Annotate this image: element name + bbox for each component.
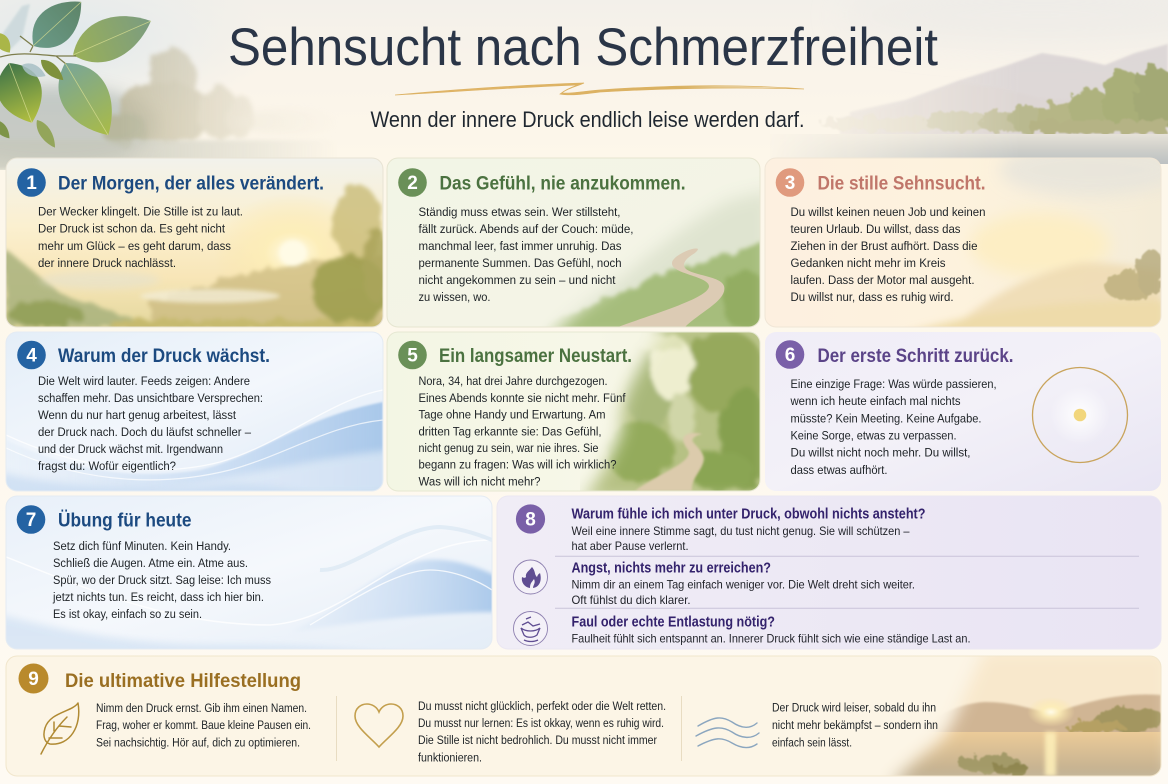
question 1: Warum fühle ich mich unter Druck, obwohl nichts ansteht? <box>572 507 926 523</box>
winding path scene <box>548 191 760 326</box>
body text 4: Die Welt wird lauter. Feeds zeigen: Andere <box>38 374 250 388</box>
badge 1 <box>17 168 46 197</box>
icon: leaf <box>41 703 79 754</box>
body text 7: Setz dich fünf Minuten. Kein Handy. <box>53 539 231 553</box>
badge 7 <box>17 505 45 534</box>
panel 4: Warum der Druck wächst <box>0 332 390 500</box>
badge 5: 5 <box>407 346 418 366</box>
body text 5: nicht genug zu sein, war nie ihres. Sie <box>418 441 599 455</box>
body text 7: jetzt nichts tun. Es reicht, dass ich hier bin. <box>52 590 264 604</box>
body text 1: der innere Druck nachlässt. <box>38 256 176 270</box>
blue waves <box>6 390 382 490</box>
sunrise scene <box>6 185 390 330</box>
body text 4: Wenn du nur hart genug arbeitest, lässt <box>38 408 237 422</box>
question 2: Nimm dir an einem Tag einfach weniger vor. Die Welt dreht sich weiter. <box>572 578 915 592</box>
body text 4: der Druck nach. Doch du läufst schneller – <box>38 425 251 439</box>
heading 6: Der erste Schritt zurück. <box>818 345 1014 367</box>
body text 3 <box>790 205 986 304</box>
heading 1: Der Morgen, der alles verändert. <box>58 172 324 194</box>
badge 2: 2 <box>407 173 418 194</box>
body text 3: Du willst nur, dass es ruhig wird. <box>790 290 954 304</box>
body text 3: Gedanken nicht mehr im Kreis <box>790 256 946 270</box>
question 1: Weil eine innere Stimme sagt, du tust nicht genug. Sie will schützen – <box>572 524 910 538</box>
heading 3: Die stille Sehnsucht. <box>818 172 986 194</box>
icon: flame <box>514 560 548 594</box>
icon: calm water <box>514 612 548 646</box>
body text 9b <box>418 699 666 764</box>
title: Sehnsucht nach Schmerzfreiheit <box>228 18 938 77</box>
question 3 <box>572 615 970 645</box>
badge 6: 6 <box>785 345 795 366</box>
body text 9a: Nimm den Druck ernst. Gib ihm einen Namen. <box>96 701 307 715</box>
body text 7: Spür, wo der Druck sitzt. Sag leise: Ich muss <box>53 573 271 587</box>
body text 6: Keine Sorge, etwas zu verpassen. <box>790 428 956 442</box>
badge 4: 4 <box>26 346 37 366</box>
panel 7: Übung für heute <box>0 496 500 660</box>
question 1 <box>572 507 926 553</box>
body text 3: teuren Urlaub. Du willst, dass das <box>790 222 960 236</box>
question 1: hat aber Pause verlernt. <box>572 539 688 553</box>
badge 2 <box>398 168 427 197</box>
body text 7: Schließ die Augen. Atme ein. Atme aus. <box>53 556 248 570</box>
badge 1: 1 <box>26 173 37 194</box>
panel 6: Der erste Schritt zurück <box>765 332 1161 491</box>
badge 8 <box>516 504 545 534</box>
body text 2: permanente Summen. Das Gefühl, noch <box>418 256 622 270</box>
body text 6: wenn ich heute einfach mal nichts <box>790 394 960 408</box>
body text 6: dass etwas aufhört. <box>790 463 888 477</box>
panel 5: Ein langsamer Neustart <box>387 330 771 492</box>
badge 7: 7 <box>26 510 36 531</box>
body text 9b: Du musst nur lernen: Es ist okkay, wenn es ruhig wird. <box>418 716 664 730</box>
heading 9: Die ultimative Hilfestellung <box>65 670 301 692</box>
body text 2: fällt zurück. Abends auf der Couch: müde, <box>418 222 634 236</box>
panel 8: Fragen und Antworten <box>497 496 1161 649</box>
body text 5: Was will ich nicht mehr? <box>418 474 541 488</box>
sunset meadow scene <box>918 158 1160 326</box>
body text 3: laufen. Dass der Motor mal ausgeht. <box>790 273 974 287</box>
badge 6 <box>776 340 804 369</box>
icon: waves <box>696 718 759 748</box>
body text 2: zu wissen, wo. <box>418 290 490 304</box>
body text 2 <box>418 205 634 304</box>
body text 9c: einfach sein lässt. <box>772 736 852 750</box>
body text 1: Der Wecker klingelt. Die Stille ist zu laut. <box>38 204 243 218</box>
decorative leaves branch <box>0 0 159 151</box>
badge 9: 9 <box>28 669 39 690</box>
body text 1: Der Druck ist schon da. Es geht nicht <box>38 222 226 236</box>
page background landscape <box>0 0 1168 170</box>
ring and sun icon <box>1032 368 1128 462</box>
body text 1 <box>38 204 243 270</box>
body text 5: Tage ohne Handy und Erwartung. Am <box>418 408 606 422</box>
panel 9: Die ultimative Hilfestellung <box>6 656 1166 776</box>
body text 2: Ständig muss etwas sein. Wer stillsteht, <box>418 205 620 219</box>
badge 8: 8 <box>525 510 536 530</box>
body text 3: Du willst keinen neuen Job und keinen <box>790 205 986 219</box>
forest path scene <box>580 330 771 492</box>
heading 4: Warum der Druck wächst. <box>58 345 270 367</box>
body text 5: dritten Tag erkannte sie: Das Gefühl, <box>418 424 602 438</box>
panel 2: Das Gefühl <box>387 158 770 335</box>
body text 5 <box>418 374 626 488</box>
body text 7 <box>52 539 271 621</box>
body text 9b: funktionieren. <box>418 750 482 764</box>
body text 9a: Sei nachsichtig. Hör auf, dich zu optimieren. <box>96 736 300 750</box>
icon: heart <box>355 704 403 747</box>
badge 9 <box>18 664 48 694</box>
heading 7: Übung für heute <box>58 508 192 532</box>
body text 9b: Die Stille ist nicht bedrohlich. Du musst nicht immer <box>418 733 657 747</box>
panel 1: Der Morgen <box>6 158 390 330</box>
body text 5: Eines Abends konnte sie nicht mehr. Fünf <box>418 391 626 405</box>
misty trees left <box>0 45 298 170</box>
body text 9c: Der Druck wird leiser, sobald du ihn <box>772 700 936 714</box>
body text 3: Ziehen in der Brust aufhört. Dass die <box>790 239 978 253</box>
body text 5: Nora, 34, hat drei Jahre durchgezogen. <box>418 374 608 388</box>
body text 1: mehr um Glück – es geht darum, dass <box>38 239 231 253</box>
body text 6: Du willst nicht noch mehr. Du willst, <box>790 446 970 460</box>
body text 2: manchmal leer, fast immer unruhig. Das <box>418 239 622 253</box>
body text 9c: nicht mehr bekämpfst – sondern ihn <box>772 718 938 732</box>
body text 2: nicht angekommen zu sein – und nicht <box>418 273 616 287</box>
title underline swoosh <box>395 83 804 95</box>
panel 3: Die stille Sehnsucht <box>764 158 1162 328</box>
question 3: Faul oder echte Entlastung nötig? <box>572 615 775 631</box>
body text 5: begann zu fragen: Was will ich wirklich? <box>418 458 617 472</box>
question 2: Oft fühlst du dich klarer. <box>572 593 690 607</box>
body text 6 <box>790 377 996 477</box>
body text 9a <box>96 701 311 750</box>
subtitle: Wenn der innere Druck endlich leise werden darf. <box>370 107 804 132</box>
body text 6: müsste? Kein Meeting. Keine Aufgabe. <box>790 411 982 425</box>
mountains and lake right <box>770 44 1168 164</box>
blue waves <box>0 527 500 660</box>
body text 7: Es ist okay, einfach so zu sein. <box>53 607 202 621</box>
question 3: Faulheit fühlt sich entspannt an. Innerer Druck fühlt sich wie eine ständige Last an. <box>572 631 970 645</box>
badge 3 <box>776 168 804 197</box>
body text 4 <box>38 374 263 473</box>
body text 9b: Du musst nicht glücklich, perfekt oder die Welt retten. <box>418 699 666 713</box>
badge 5 <box>398 341 427 369</box>
body text 4: schaffen mehr. Das unsichtbare Versprechen: <box>38 391 263 405</box>
question 2 <box>572 561 915 607</box>
body text 6: Eine einzige Frage: Was würde passieren, <box>790 377 996 391</box>
question 2: Angst, nichts mehr zu erreichen? <box>572 561 771 577</box>
body text 4: und der Druck wächst mit. Irgendwann <box>38 442 223 456</box>
lake sunset scene <box>880 656 1166 776</box>
body text 9a: Frag, woher er kommt. Baue kleine Pausen ein. <box>96 718 311 732</box>
body text 4: fragst du: Wofür eigentlich? <box>38 459 176 473</box>
body text 9c <box>772 700 938 750</box>
heading 5: Ein langsamer Neustart. <box>439 345 632 367</box>
badge 4 <box>17 341 46 369</box>
badge 3: 3 <box>785 173 795 194</box>
heading 2: Das Gefühl, nie anzukommen. <box>440 172 686 194</box>
